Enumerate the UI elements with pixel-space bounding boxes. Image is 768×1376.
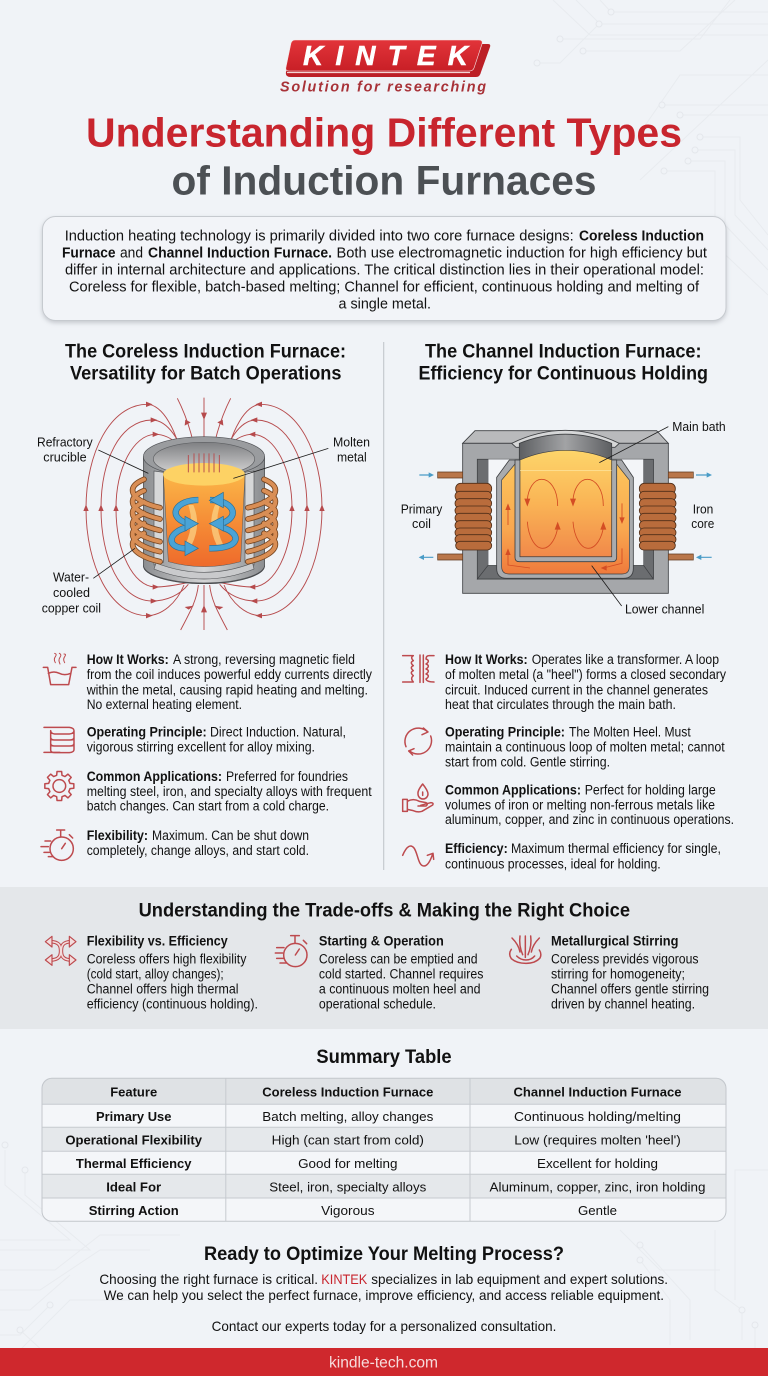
text: continuous processes, ideal for holding. [445, 857, 661, 872]
heading: coreless: The Coreless Induction Furnace: [65, 340, 346, 362]
text: How It Works: [445, 652, 528, 667]
text: stirring for homogeneity; [551, 967, 685, 982]
text: How It Works: [87, 652, 169, 667]
icon: cycle arrows [405, 728, 432, 755]
labels: metal [337, 450, 367, 465]
text: completely, change alloys, and start cold. [87, 843, 309, 858]
text: Preferred for foundries [226, 769, 348, 784]
text [445, 841, 721, 872]
icon: pot with steam [43, 653, 76, 685]
leader lines [592, 427, 668, 606]
row: stirring action: Gentle [578, 1203, 617, 1218]
icon: transformer [403, 655, 434, 682]
coreless: common applications [45, 769, 372, 814]
diagram: channel furnace [401, 419, 726, 616]
labels: copper coil [42, 600, 101, 615]
intro panel: Coreless Induction [579, 228, 704, 245]
intro panel: and [120, 245, 143, 262]
text: The Molten Heel. Must [569, 725, 691, 740]
intro panel: differ in internal architecture and applications. The critical distinction lies in their operational model: [65, 262, 704, 279]
row: operational flexibility: High (can start from cold) [272, 1133, 424, 1148]
channel: common applications [403, 783, 734, 827]
trade-off: starting and operation [275, 934, 484, 1012]
title: Understanding Different Types [86, 110, 682, 156]
row: thermal efficiency: Thermal Efficiency [76, 1156, 192, 1171]
text [86, 652, 372, 712]
current arrows [419, 472, 712, 560]
labels: Molten [333, 435, 370, 450]
text: (cold start, alloy changes); [87, 967, 224, 982]
row: stirring action: Stirring Action [89, 1203, 179, 1218]
logo: KINTEK [280, 40, 490, 96]
row: stirring action: Vigorous [321, 1203, 375, 1218]
cta text [99, 1271, 668, 1334]
text: Direct Induction. Natural, [210, 725, 346, 740]
trade-off: flexibility vs efficiency [45, 934, 258, 1012]
text: cold started. Channel requires [319, 967, 484, 982]
text: Channel offers high thermal [87, 982, 239, 997]
labels: Lower channel [625, 601, 704, 616]
icon: coil stack [44, 727, 74, 753]
text: maintain a continuous loop of molten metal; cannot [445, 740, 725, 755]
text: Starting & Operation [319, 934, 444, 949]
leader lines [93, 448, 328, 578]
text [87, 934, 258, 1012]
row: ideal for: Steel, iron, specialty alloys [269, 1180, 427, 1195]
text: circuit. Induced current in the channel generates [445, 683, 708, 698]
cta text: Contact our experts today for a personalized consultation. [212, 1318, 556, 1334]
text: of molten metal (a "heel") forms a closed secondary [445, 667, 726, 682]
footer bar: kindle-tech.com [329, 1355, 438, 1372]
labels: coil [412, 516, 431, 531]
text [87, 769, 372, 814]
intro panel: Both use electromagnetic induction for high efficiency but [336, 245, 708, 262]
row: primary use: Batch melting, alloy changes [262, 1109, 434, 1124]
row: thermal efficiency [76, 1156, 658, 1171]
divider [383, 342, 384, 870]
text: Common Applications: [445, 783, 581, 798]
labels: Main bath [672, 419, 726, 434]
row: operational flexibility: Operational Flexibility [65, 1133, 203, 1148]
text: Operating Principle: [445, 725, 565, 740]
labels [37, 435, 370, 615]
row: operational flexibility: Low (requires molten 'heel') [514, 1133, 681, 1148]
text: vigorous stirring excellent for alloy mixing. [87, 740, 315, 755]
labels: crucible [43, 450, 87, 465]
text: driven by channel heating. [551, 997, 695, 1012]
text [87, 725, 346, 755]
text: start from cold. Gentle stirring. [445, 755, 610, 770]
heading: channel: Efficiency for Continuous Holding [418, 362, 708, 384]
text: Efficiency: [445, 841, 508, 856]
text: melting steel, iron, and specialty alloys with frequent [87, 784, 372, 799]
heading: channel [418, 340, 708, 384]
heading: coreless [65, 340, 346, 384]
text: Common Applications: [87, 769, 222, 784]
heading: summary table: Summary Table [316, 1046, 452, 1068]
text [551, 934, 709, 1012]
text [87, 828, 309, 858]
labels: Refractory [37, 435, 93, 450]
cta text: Choosing the right furnace is critical. [99, 1271, 318, 1287]
text: aluminum, copper, and zinc in continuous operations. [445, 812, 734, 827]
intro panel: Coreless for flexible, batch-based melting; Channel for efficient, continuous holding and melting of [69, 279, 700, 296]
text: Channel offers gentle stirring [551, 982, 709, 997]
molten metal [163, 453, 245, 567]
text: Coreless previdés vigorous [551, 952, 699, 967]
icon: sine wave [403, 846, 434, 866]
intro panel: Channel Induction Furnace. [148, 245, 332, 262]
cta heading: Ready to Optimize Your Melting Process? [204, 1243, 564, 1265]
text: No external heating element. [87, 697, 242, 712]
icon: stopwatch [275, 936, 307, 967]
intro panel [42, 216, 726, 320]
coreless: how it works [43, 652, 372, 712]
row: ideal for: Aluminum, copper, zinc, iron holding [490, 1180, 706, 1195]
row: primary use [96, 1109, 681, 1124]
row: stirring action [89, 1203, 617, 1218]
channel: how it works [403, 652, 726, 712]
text: operational schedule. [319, 997, 436, 1012]
coreless: operating principle [44, 725, 346, 755]
cta text: specializes in lab equipment and expert solutions. [371, 1271, 668, 1287]
text: Operates like a transformer. A loop [532, 652, 719, 667]
trade-off: metallurgical stirring [510, 934, 709, 1012]
copper terminals [438, 472, 693, 560]
copper coil [133, 479, 275, 562]
panel: trade-offs [0, 887, 768, 1029]
intro panel: a single metal. [338, 296, 431, 313]
call to action [99, 1243, 668, 1334]
primary coil [455, 483, 676, 550]
icon: stopwatch [41, 830, 73, 860]
row: thermal efficiency: Good for melting [298, 1156, 397, 1171]
labels: Water- [53, 570, 89, 585]
stirring arrows [171, 492, 236, 556]
labels: Primary [401, 501, 443, 516]
text: volumes of iron or melting non-ferrous metals like [445, 798, 715, 813]
cta text: We can help you select the perfect furnace, improve efficiency, and access reliable equipment. [104, 1287, 664, 1303]
table header: Channel Induction Furnace [514, 1084, 682, 1099]
labels: core [691, 516, 714, 531]
logo: KINTEK: Solution for researching [280, 80, 486, 96]
heading: coreless: Versatility for Batch Operations [70, 362, 342, 384]
coreless: flexibility [41, 828, 309, 860]
text: A strong, reversing magnetic field [173, 652, 355, 667]
text: Maximum thermal efficiency for single, [511, 841, 721, 856]
magnetic field lines [83, 398, 325, 630]
row: primary use: Primary Use [96, 1109, 171, 1124]
row: primary use: Continuous holding/melting [514, 1109, 681, 1124]
cta text: KINTEK [321, 1271, 368, 1287]
text: heat that circulates through the main bath. [445, 697, 676, 712]
vessel [497, 430, 633, 578]
text: efficiency (continuous holding). [87, 997, 258, 1012]
intro panel: Induction heating technology is primarily divided into two core furnace designs: [65, 228, 574, 245]
text: Flexibility: [87, 828, 148, 843]
text: from the coil induces powerful eddy currents directly [87, 667, 372, 682]
text: Operating Principle: [87, 725, 207, 740]
intro panel: Furnace [62, 245, 116, 262]
row: ideal for: Ideal For [106, 1180, 161, 1195]
circulation arrows [505, 479, 625, 571]
labels: cooled [53, 585, 90, 600]
heading: channel: The Channel Induction Furnace: [425, 340, 702, 362]
text [445, 783, 734, 827]
labels [401, 419, 726, 616]
icon: crossing arrows [45, 936, 76, 965]
iron core [463, 431, 668, 593]
text: a continuous molten heel and [319, 982, 480, 997]
labels: Iron [693, 501, 713, 516]
row: ideal for [106, 1180, 705, 1195]
title: of Induction Furnaces [172, 157, 596, 203]
trade-offs heading: Understanding the Trade-offs & Making the Right Choice [139, 900, 630, 922]
text: Metallurgical Stirring [551, 934, 678, 949]
text: within the metal, causing rapid heating and melting. [86, 683, 368, 698]
footer bar [0, 1348, 768, 1376]
icon: hand with drop [403, 784, 433, 812]
summary table [42, 1078, 726, 1221]
channel: efficiency [403, 841, 721, 872]
table header: Feature [110, 1084, 157, 1099]
text [445, 652, 726, 712]
table header [110, 1084, 681, 1099]
channel: operating principle [405, 725, 725, 770]
text: Perfect for holding large [585, 783, 716, 798]
title [86, 110, 682, 203]
row: operational flexibility [65, 1133, 681, 1148]
icon: stirring [510, 936, 541, 963]
row: thermal efficiency: Excellent for holding [537, 1156, 658, 1171]
text: Coreless can be emptied and [319, 952, 478, 967]
text [445, 725, 725, 770]
icon: gear [45, 771, 74, 800]
text [319, 934, 484, 1012]
diagram: coreless furnace [37, 398, 370, 630]
text: Coreless offers high flexibility [87, 952, 247, 967]
logo: KINTEK: KINTEK [303, 40, 470, 71]
text: Flexibility vs. Efficiency [87, 934, 228, 949]
crucible [143, 437, 265, 584]
table header: Coreless Induction Furnace [262, 1084, 433, 1099]
text: batch changes. Can start from a cold charge. [87, 799, 329, 814]
text: Maximum. Can be shut down [152, 828, 309, 843]
